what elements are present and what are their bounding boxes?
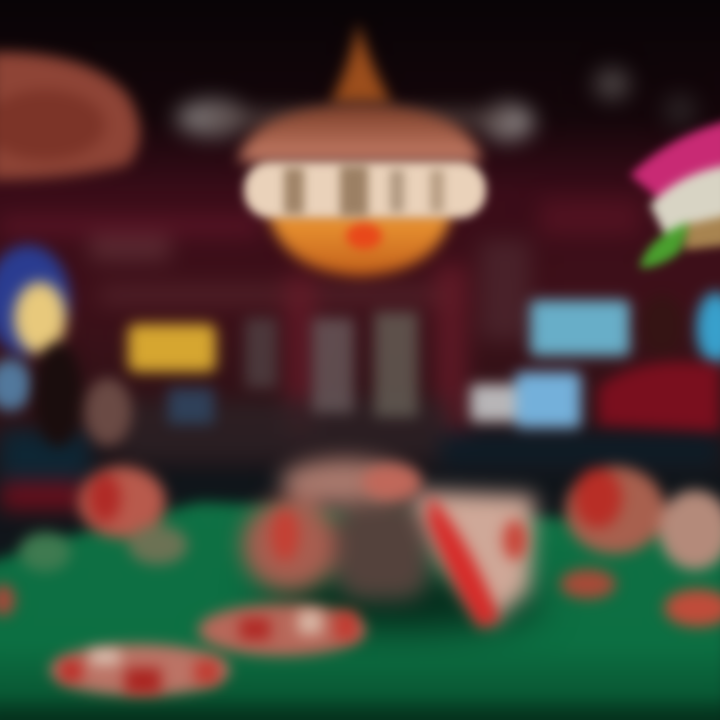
chips: central pile (242, 458, 540, 630)
sign: yellow panel (128, 324, 216, 372)
lamp: central chandelier sign (238, 104, 486, 276)
chips: right stacks (560, 466, 720, 627)
lamp: side lights (176, 68, 696, 140)
panel: central slot machines (168, 312, 418, 424)
decoration: right rainbow sign (630, 120, 720, 268)
chips: left stack on back table (0, 466, 188, 616)
vignette: darkened lower edge (0, 708, 720, 720)
sign: blue screens at right (470, 292, 720, 428)
chips: front stack left (50, 644, 230, 696)
table: green felt (0, 502, 720, 720)
figure: dark person at left (34, 343, 132, 447)
sign: left blue and yellow wheel (0, 245, 70, 411)
chips: front stack centre (198, 604, 366, 656)
back wall: maroon arches and columns (0, 200, 720, 510)
decoration: top-left pink shape (0, 52, 140, 180)
lamp: spire top (330, 22, 392, 104)
figure: person in red at right (598, 295, 720, 432)
